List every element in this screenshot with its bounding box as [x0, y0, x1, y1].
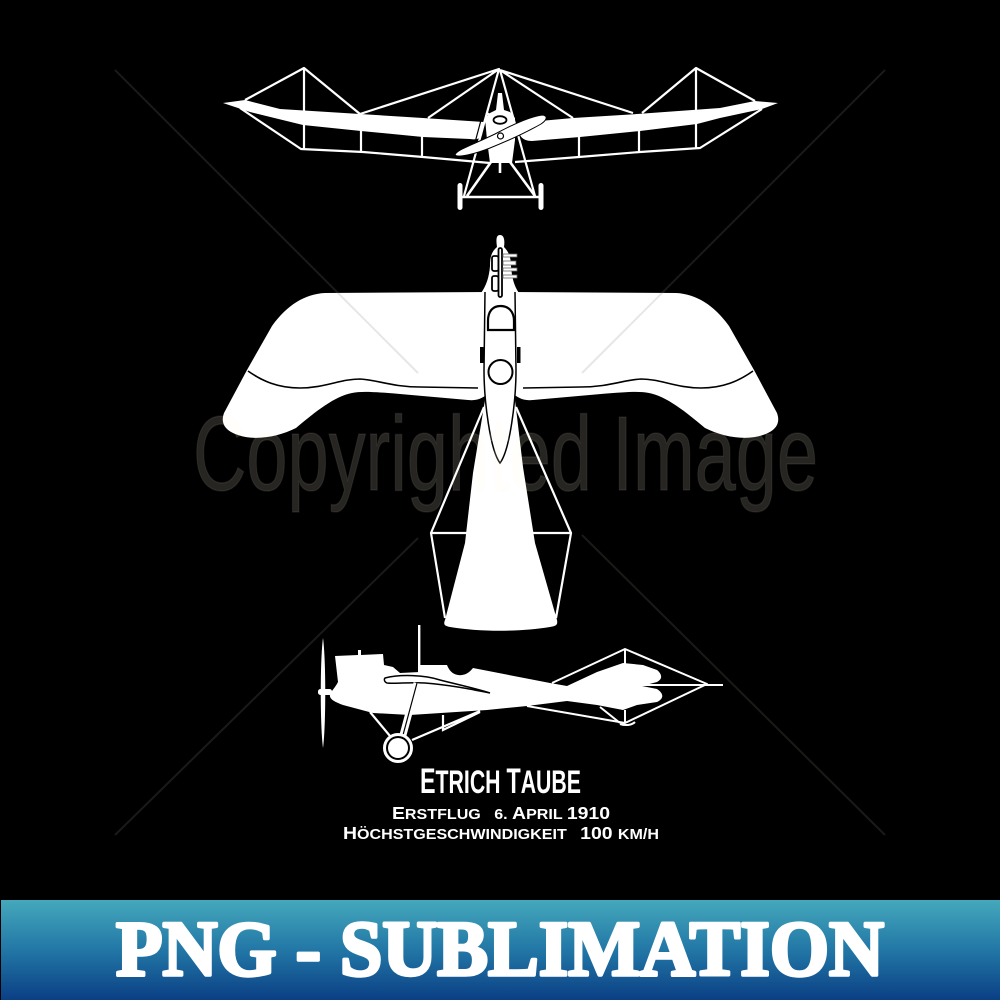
top speed line: HÖCHSTGESCHWINDIGKEIT 100 KM/H — [343, 823, 659, 843]
side view mast — [418, 625, 420, 673]
top view fuselage — [484, 292, 516, 463]
top view aircraft — [223, 235, 778, 631]
first flight line: ERSTFLUG 6. APRIL 1910 — [392, 803, 610, 823]
tail wires — [431, 407, 571, 618]
front view propeller — [455, 115, 546, 156]
tail fan — [444, 400, 557, 631]
centre ring — [488, 360, 512, 384]
front wheels — [458, 183, 544, 210]
side view aircraft — [318, 625, 723, 762]
engine cylinders — [503, 254, 517, 278]
watermark diagonals — [115, 70, 885, 835]
front view left wing — [223, 100, 484, 139]
front view cowling oval — [494, 116, 506, 124]
banner background — [1, 900, 1000, 1000]
front view fuselage — [485, 93, 515, 163]
side view wheel — [384, 734, 412, 762]
engine detail — [492, 248, 502, 297]
left wing planform — [223, 292, 490, 438]
wing root marks — [480, 347, 520, 363]
side view landing gear — [370, 711, 480, 740]
cockpit — [488, 306, 514, 330]
side view propeller — [321, 638, 325, 748]
side view fuselage silhouette — [330, 650, 662, 715]
front view aircraft — [223, 68, 778, 210]
wing flex lines — [248, 371, 753, 388]
propeller hub — [498, 133, 504, 139]
side view tail wires — [527, 649, 723, 725]
banner text: PNG - SUBLIMATION — [116, 905, 884, 992]
side view wing section — [384, 676, 490, 693]
front view body wires — [460, 113, 541, 197]
banner — [1, 900, 1000, 1000]
front view right wing — [518, 101, 778, 141]
top view nose and fillet — [481, 235, 519, 293]
title: ETRICH TAUBE — [420, 762, 581, 801]
right wing planform — [511, 292, 778, 438]
front view wires and struts — [240, 68, 762, 196]
